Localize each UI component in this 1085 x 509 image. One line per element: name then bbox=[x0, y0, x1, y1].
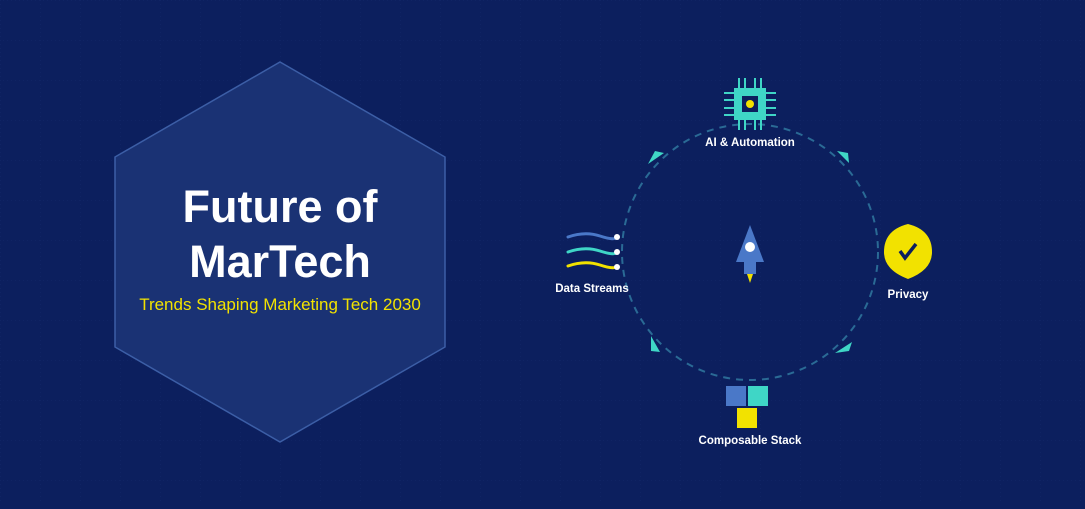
icon: rocket bbox=[736, 225, 764, 283]
icon: composable stack bbox=[726, 386, 768, 428]
label: Data Streams: Data Streams bbox=[555, 283, 629, 295]
subtitle: Trends Shaping Marketing Tech 2030 bbox=[139, 295, 421, 314]
diagram: cycle ring bbox=[622, 124, 878, 380]
panel: title hexagon bbox=[115, 62, 445, 442]
icon: privacy shield bbox=[884, 224, 932, 279]
label: AI & Automation: AI & Automation bbox=[705, 137, 795, 149]
arrows on ring bbox=[648, 151, 852, 353]
label: Privacy: Privacy bbox=[888, 289, 929, 301]
icon: AI chip bbox=[724, 78, 776, 130]
icon: data streams bbox=[568, 234, 620, 270]
title: Future of bbox=[183, 181, 378, 232]
panel: title hexagon: MarTech bbox=[189, 236, 371, 287]
label: Composable Stack: Composable Stack bbox=[699, 435, 802, 447]
